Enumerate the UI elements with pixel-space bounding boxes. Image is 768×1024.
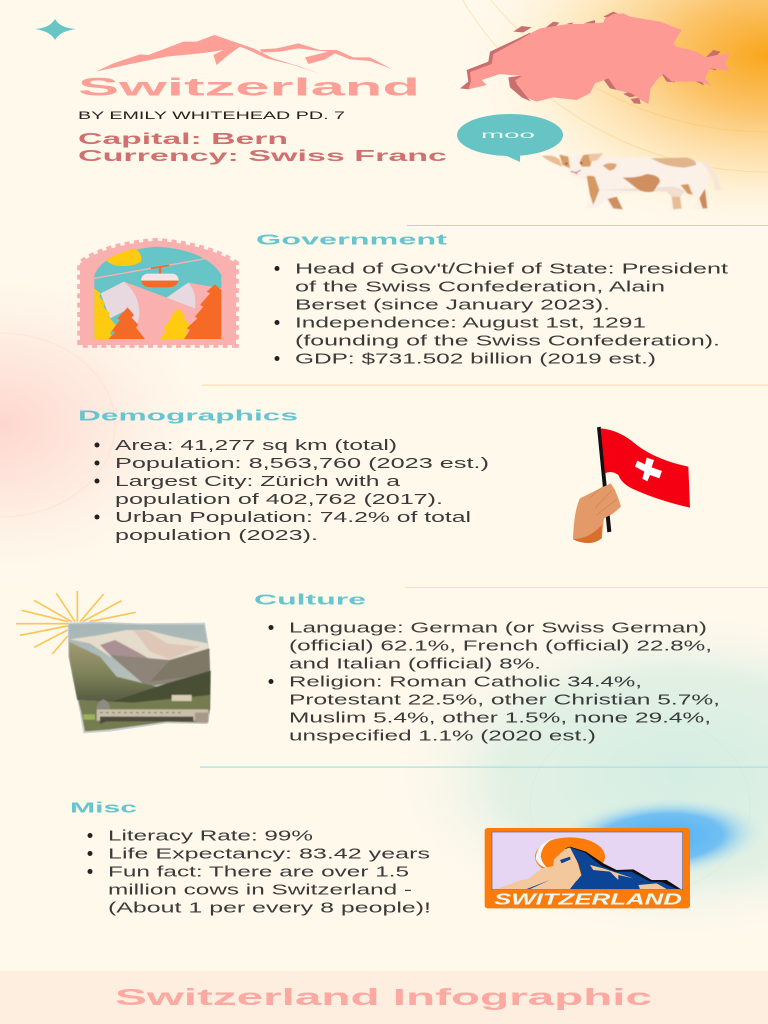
text block: Misc facts: Fun fact: There are over 1.5 [108,864,409,880]
text block: Culture facts: Muslim 5.4%, other 1.5%, none 29.4%, [289,710,711,726]
heading: Demographics: Demographics [78,408,298,424]
capital and currency: Capital: Bern [78,131,288,148]
footer band [0,971,768,1024]
text block: Government facts: of the Swiss Confederation, Alain [295,280,665,296]
speech bubble: moo [457,114,563,162]
icon: hand holding Swiss flag [573,427,690,543]
section divider [407,225,768,226]
text block: Misc facts: Life Expectancy: 83.42 years [108,846,430,862]
footer title: Switzerland Infographic [115,984,652,1010]
text block: Demographics facts: Area: 41,277 sq km (total) [115,438,397,454]
capital and currency: Currency: Swiss Franc [78,148,447,165]
text block: Misc facts [88,828,431,916]
text block: Government facts: Berset (since January 2023). [295,298,610,314]
text block: Demographics facts: Population: 8,563,760 (2023 est.) [115,456,489,472]
illustration: cow [542,153,721,209]
icon: teal sparkle [35,19,76,40]
speech bubble: moo: moo [481,129,535,141]
capital and currency [78,131,447,165]
text block: Culture facts: Protestant 22.5%, other Christian 5.7%, [289,692,720,708]
heading: Misc: Misc [70,800,137,816]
text block: Demographics facts: Urban Population: 74.2% of total [115,510,471,526]
text block: Culture facts: unspecified 1.1% (2020 est.) [289,728,596,744]
text block: Culture facts: and Italian (official) 8%. [289,656,541,672]
section divider [202,384,768,386]
heading: Government: Government [256,232,447,248]
text block: Misc facts: (About 1 per every 8 people)! [108,900,431,916]
text block: Culture facts: Language: German (or Swiss German) [289,620,707,636]
text block: Demographics facts: population (2023). [115,528,318,544]
map of Switzerland [460,12,730,104]
text block: Government facts: (founding of the Swiss Confederation). [295,334,720,350]
badge: Switzerland mountain logo [485,828,690,908]
text block: Misc facts: million cows in Switzerland - [108,882,412,898]
text block: Culture facts [268,620,720,744]
text block: Demographics facts: Largest City: Zürich with a [115,474,402,490]
text block: Demographics facts: population of 402,762 (2017). [115,492,443,508]
text block: Culture facts: Religion: Roman Catholic 34.4%, [289,674,642,690]
text block: Demographics facts [94,438,489,544]
title: Switzerland [78,74,420,102]
heading: Culture: Culture [254,592,366,608]
byline: BY EMILY WHITEHEAD PD. 7 [78,110,345,122]
badge: Switzerland mountain logo: SWITZERLAND [494,891,682,908]
text block: Government facts [274,262,728,368]
text block: Government facts: Head of Gov't/Chief of State: President [295,262,728,278]
text block: Government facts: Independence: August 1st, 1291 [295,316,646,332]
text block: Misc facts: Literacy Rate: 99% [108,828,313,844]
icon: mountain outline [96,35,392,74]
section divider [405,587,768,588]
text block: Government facts: GDP: $731.502 billion (2019 est.) [295,352,656,368]
stamp illustration [80,241,236,345]
photo: torn-paper alpine view with sunburst [16,591,211,733]
text block: Culture facts: (official) 62.1%, French (official) 22.8%, [289,638,712,654]
section divider [200,766,768,768]
